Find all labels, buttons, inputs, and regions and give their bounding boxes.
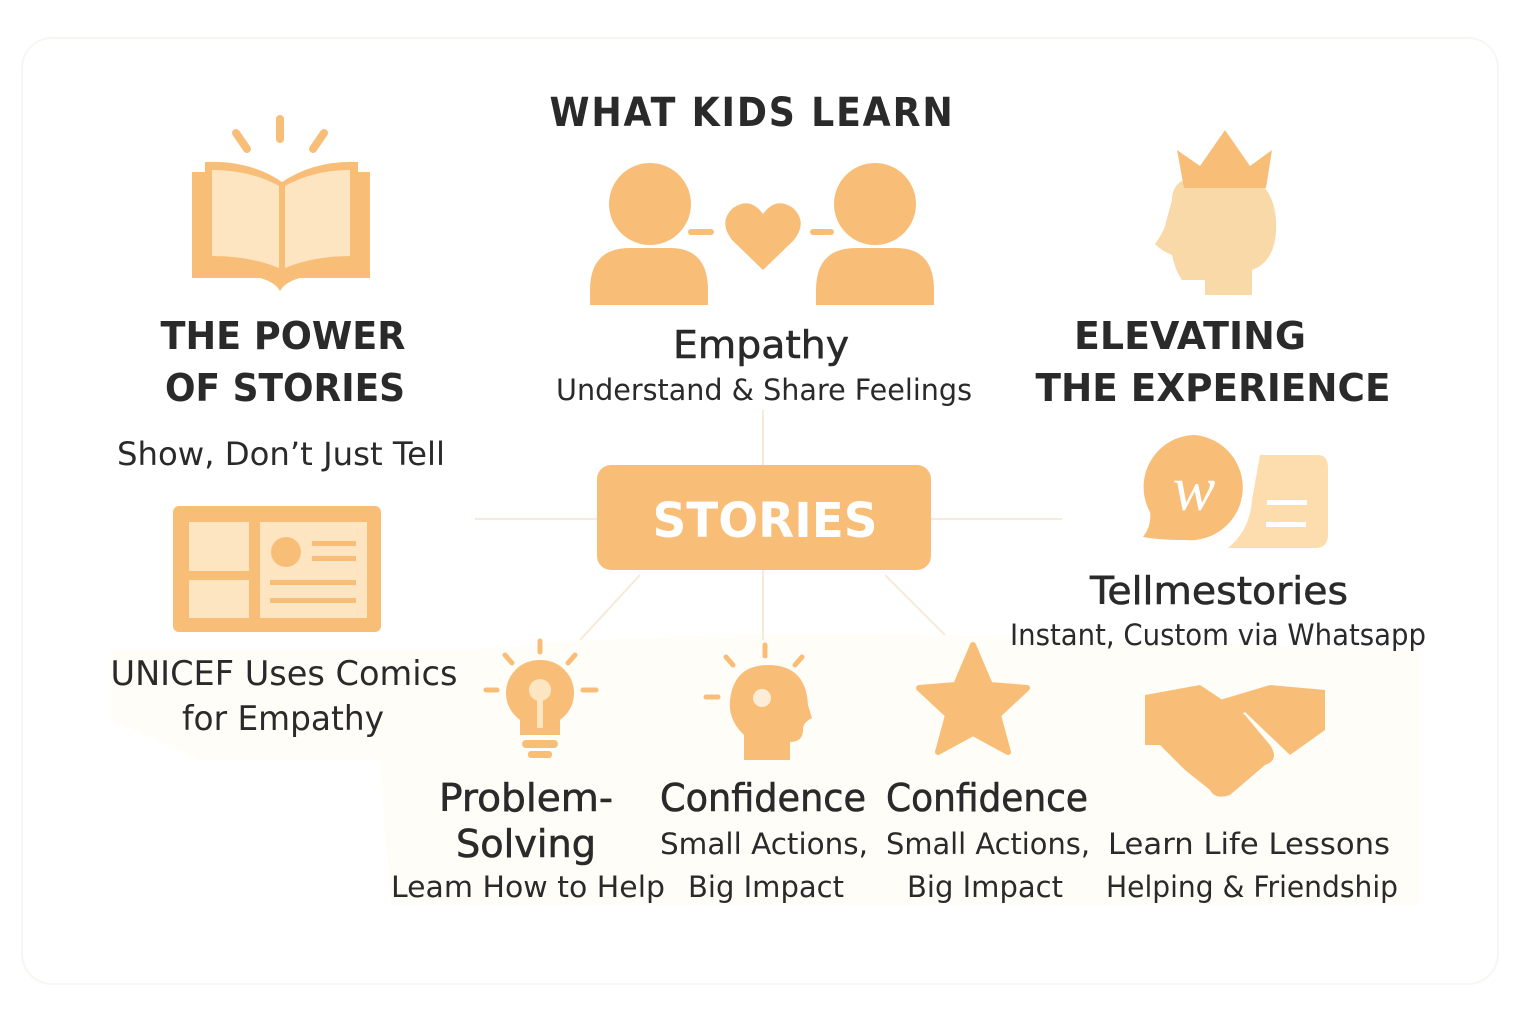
column: confidence 2 xyxy=(886,776,1090,904)
heading: elevating the experience: THE EXPERIENCE xyxy=(1036,366,1390,410)
icon: tellmestories chat xyxy=(1143,435,1328,548)
heading: the power of stories: OF STORIES xyxy=(165,366,405,410)
column: confidence 2: Big Impact xyxy=(907,870,1063,904)
icon: empathy people xyxy=(590,163,934,305)
icon: crowned head xyxy=(1155,130,1276,295)
column: confidence 2: Small Actions, xyxy=(886,827,1090,861)
column: confidence 1: Small Actions, xyxy=(660,827,868,861)
center node: stories: STORIES xyxy=(652,493,878,549)
column: problem-solving: Problem- xyxy=(439,776,613,820)
icon: tellmestories chat: w xyxy=(1173,453,1216,524)
text: unicef uses comics: UNICEF Uses Comics xyxy=(110,654,458,694)
column: confidence 1: Confidence xyxy=(660,776,866,820)
icon: head with lightbulb xyxy=(706,645,812,760)
text: show don't just tell: Show, Don’t Just Tell xyxy=(117,435,445,473)
text: unicef uses comics: for Empathy xyxy=(182,699,384,739)
column: confidence 1 xyxy=(660,776,868,904)
heading: tellmestories: Tellmestories xyxy=(1089,569,1348,613)
column: confidence 2: Confidence xyxy=(886,776,1088,820)
icon: star xyxy=(919,645,1027,752)
heading: the power of stories: THE POWER xyxy=(160,314,406,358)
column: life lessons: Helping & Friendship xyxy=(1106,870,1398,904)
heading: elevating the experience xyxy=(1036,314,1390,410)
heading: elevating the experience: ELEVATING xyxy=(1074,314,1306,358)
icon: open book xyxy=(192,119,370,291)
center node: stories xyxy=(597,465,931,570)
title: WHAT KIDS LEARN xyxy=(550,90,954,136)
icon: lightbulb xyxy=(486,641,596,758)
column: problem-solving: Leam How to Help xyxy=(391,870,665,904)
text: instant custom via whatsapp: Instant, Custom via Whatsapp xyxy=(1010,618,1426,652)
column: problem-solving: Solving xyxy=(456,822,596,866)
column: life lessons: Learn Life Lessons xyxy=(1108,827,1390,861)
column: life lessons xyxy=(1106,827,1398,904)
icon: handshake xyxy=(1145,685,1325,797)
text: understand & share feelings: Understand & Share Feelings xyxy=(556,373,972,407)
heading: empathy: Empathy xyxy=(673,323,849,367)
column: problem-solving xyxy=(391,776,665,904)
text: unicef uses comics xyxy=(110,654,458,739)
heading: the power of stories xyxy=(160,314,406,410)
icon: comic panels xyxy=(173,506,381,632)
column: confidence 1: Big Impact xyxy=(688,870,844,904)
